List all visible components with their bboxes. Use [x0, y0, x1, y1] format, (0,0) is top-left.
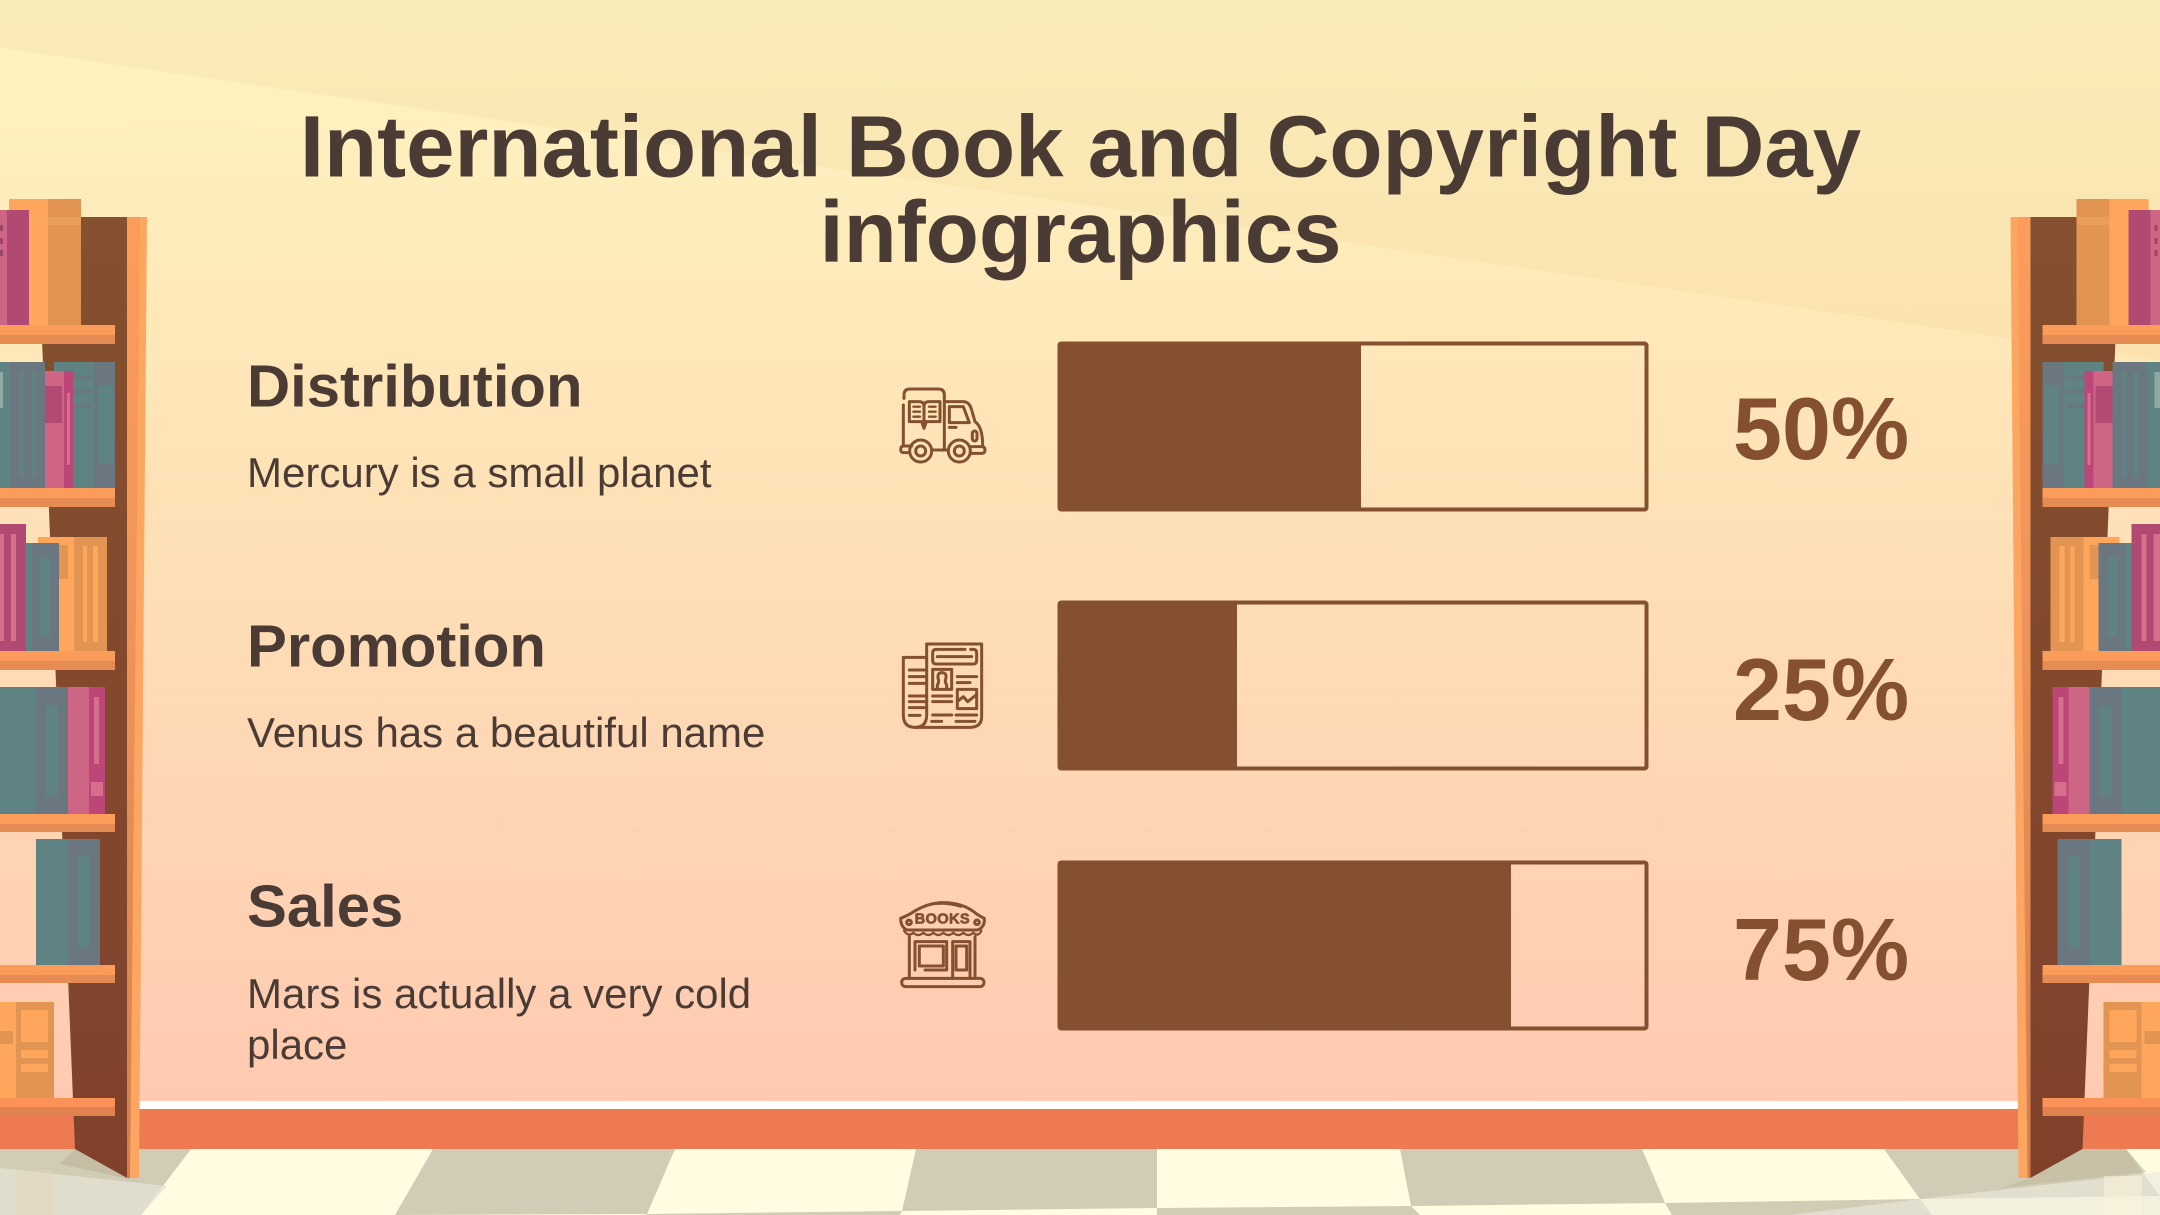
title: International Book and Copyright Day — [300, 98, 1861, 196]
bookcase back panel — [37, 217, 127, 1178]
row: promotion — [247, 601, 1909, 770]
books shelf 4 — [0, 687, 105, 814]
books shelf 6 — [0, 1002, 54, 1098]
bookcase left — [0, 199, 147, 1178]
description: distribution: Mercury is a small planet — [247, 449, 712, 496]
icon: bookshop — [901, 903, 984, 987]
row: distribution — [247, 342, 1909, 511]
checkered floor — [0, 1149, 2160, 1215]
title: infographics — [819, 184, 1342, 281]
description: sales: place — [247, 1021, 347, 1068]
heading: distribution: Distribution — [247, 352, 582, 420]
books shelf 1 — [0, 199, 81, 325]
bar: 25% — [1058, 601, 1646, 770]
shelves — [0, 325, 115, 1116]
percentage: 25%: 25% — [1733, 640, 1909, 739]
heading: promotion: Promotion — [247, 612, 546, 680]
percentage: 75%: 75% — [1733, 900, 1909, 999]
bookcase right — [2010, 199, 2160, 1178]
skirting board — [0, 1101, 2160, 1149]
bar: 50% — [1058, 342, 1646, 511]
icon: book truck — [901, 389, 985, 462]
icon: bookshop: BOOKS — [915, 912, 970, 928]
icon: newspaper — [903, 644, 982, 727]
bar: 75% — [1058, 861, 1646, 1030]
row: sales — [247, 861, 1909, 1068]
description: promotion: Venus has a beautiful name — [247, 709, 765, 756]
floor reflection left — [0, 1149, 167, 1215]
description: sales: Mars is actually a very cold — [247, 970, 751, 1017]
percentage: 50%: 50% — [1733, 379, 1909, 478]
bookcase upright — [127, 217, 147, 1178]
books shelf 3 — [0, 524, 107, 651]
heading: sales: Sales — [247, 872, 403, 940]
books shelf 2 — [0, 362, 115, 488]
floor reflection right — [1790, 1149, 2160, 1215]
wall light band — [0, 0, 2160, 360]
title — [300, 98, 1861, 281]
books shelf 5 — [36, 839, 100, 965]
